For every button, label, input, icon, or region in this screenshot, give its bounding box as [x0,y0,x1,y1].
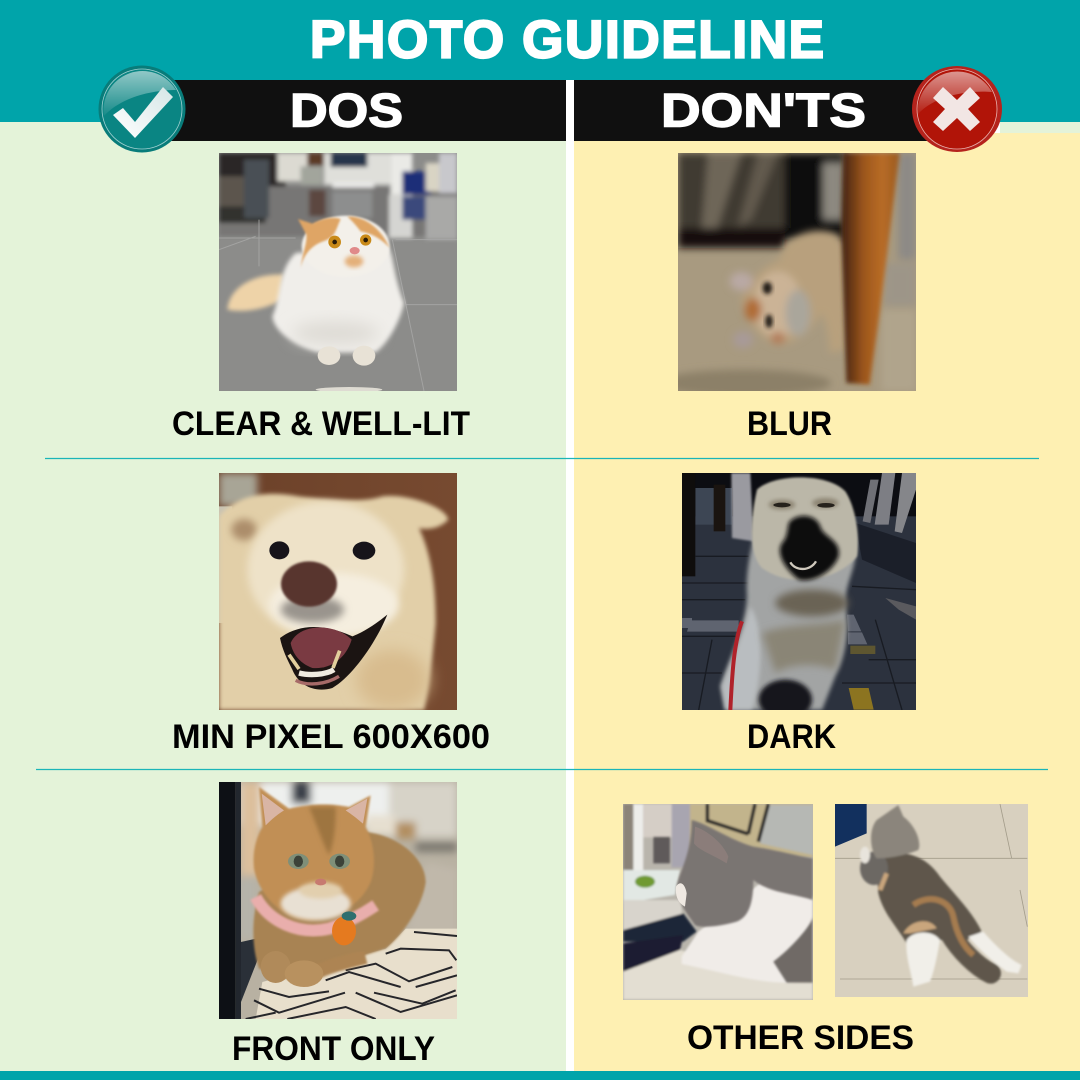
heading bar: dos [160,80,566,141]
photo: dark dog [682,473,916,720]
heading bar: don'ts [574,80,934,141]
photo: clear well-lit cat [219,153,457,392]
heading bar: don'ts: DON'TS [661,84,866,136]
heading bar: dos: DOS [290,84,403,136]
panel: dos background [0,122,566,1080]
photo: close-up dog [219,473,457,710]
label: blur: BLUR [747,405,832,443]
divider line one [45,458,1039,460]
panel: don'ts background [574,133,1080,1080]
footer band [0,1071,1080,1080]
label: dark: DARK [747,718,836,756]
title: PHOTO GUIDELINE [310,10,824,70]
icon: cross badge [912,66,1002,152]
label: other sides: OTHER SIDES [687,1019,914,1057]
photo: cat lying down from behind [833,800,1033,1000]
divider line two [36,768,1048,770]
label: min pixel 600x600: MIN PIXEL 600X600 [172,718,490,756]
column divider [566,80,574,1080]
header band [0,0,1080,122]
label: clear and well-lit: CLEAR & WELL-LIT [172,405,470,443]
photo: cat from behind [620,800,820,1003]
icon: check mark badge [98,66,186,152]
photo: front-facing cat [219,782,457,1019]
photo: blurred cat [658,153,916,396]
panel: strip above don'ts [1000,122,1080,133]
label: front only: FRONT ONLY [232,1030,435,1068]
